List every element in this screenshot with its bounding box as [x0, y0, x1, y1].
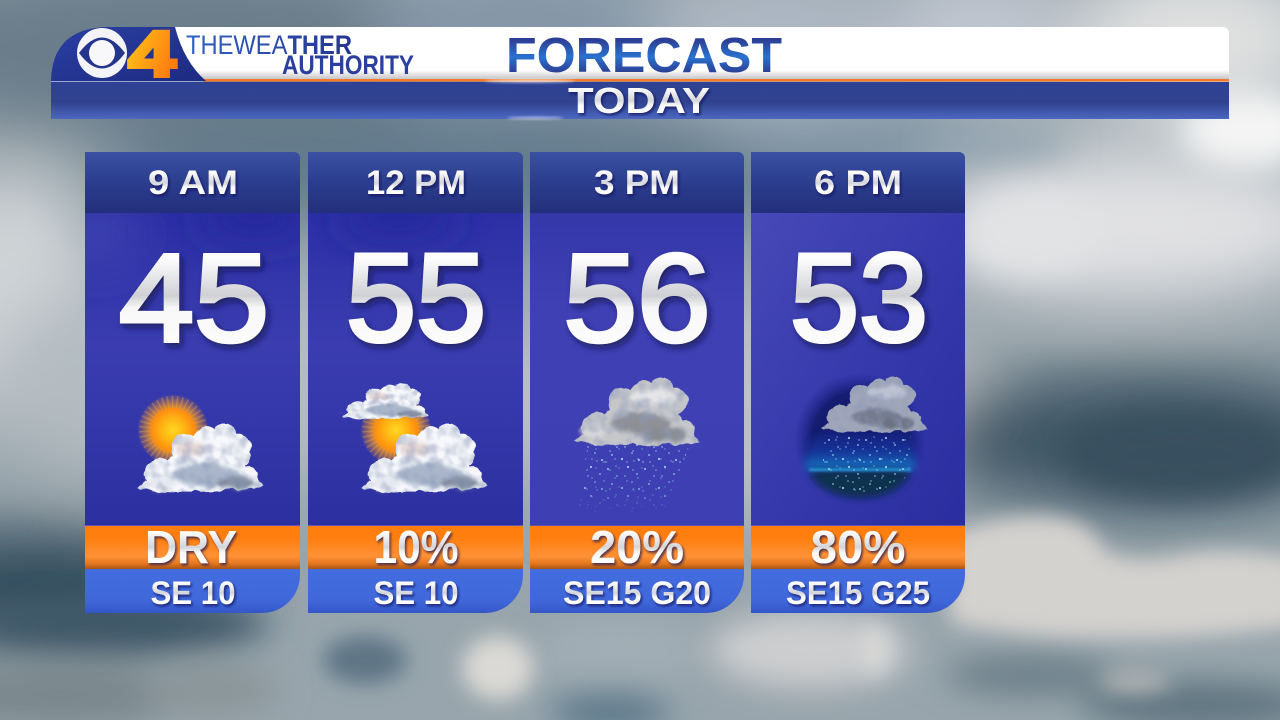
subtitle: TODAY [568, 80, 710, 121]
time: 9 AM [148, 164, 238, 202]
orange rule [200, 79, 1229, 82]
icon: sun and cloud [137, 394, 264, 492]
icon: sun between clouds [342, 384, 488, 492]
time: 3 PM [594, 164, 680, 202]
panel: 6 PM [751, 152, 966, 613]
precipitation: 10% [374, 521, 458, 573]
icon: cloud with light snow [574, 378, 699, 512]
blue TODAY band [51, 82, 1229, 119]
temperature: 56 [564, 229, 710, 368]
precipitation: 80% [810, 521, 906, 573]
lens flares [485, 79, 575, 119]
CBS eye logo [77, 28, 127, 78]
time: 6 PM [814, 164, 902, 202]
wind: SE 10 [150, 575, 236, 611]
channel 4 numeral: 4 [128, 18, 176, 90]
temperature: 55 [346, 229, 486, 368]
precipitation: DRY [145, 521, 237, 573]
icon: cloud with heavy snow [794, 373, 928, 505]
wind: SE15 G25 [786, 575, 930, 611]
white title bar [170, 27, 1229, 79]
panel: 9 AM [85, 152, 300, 613]
The Weather tagline: THEWEATHER [186, 30, 352, 60]
temperature: 53 [790, 229, 928, 368]
precipitation: 20% [590, 521, 684, 573]
title: FORECAST [506, 29, 782, 83]
header banner [51, 18, 1229, 121]
panel: 3 PM [530, 152, 745, 613]
Authority tagline: AUTHORITY [282, 50, 414, 80]
panel: 12 PM [308, 152, 523, 613]
wind: SE 10 [374, 575, 458, 611]
time: 12 PM [366, 164, 466, 202]
wind: SE15 G20 [563, 575, 711, 611]
temperature: 45 [119, 229, 269, 368]
logo plate [51, 27, 206, 81]
